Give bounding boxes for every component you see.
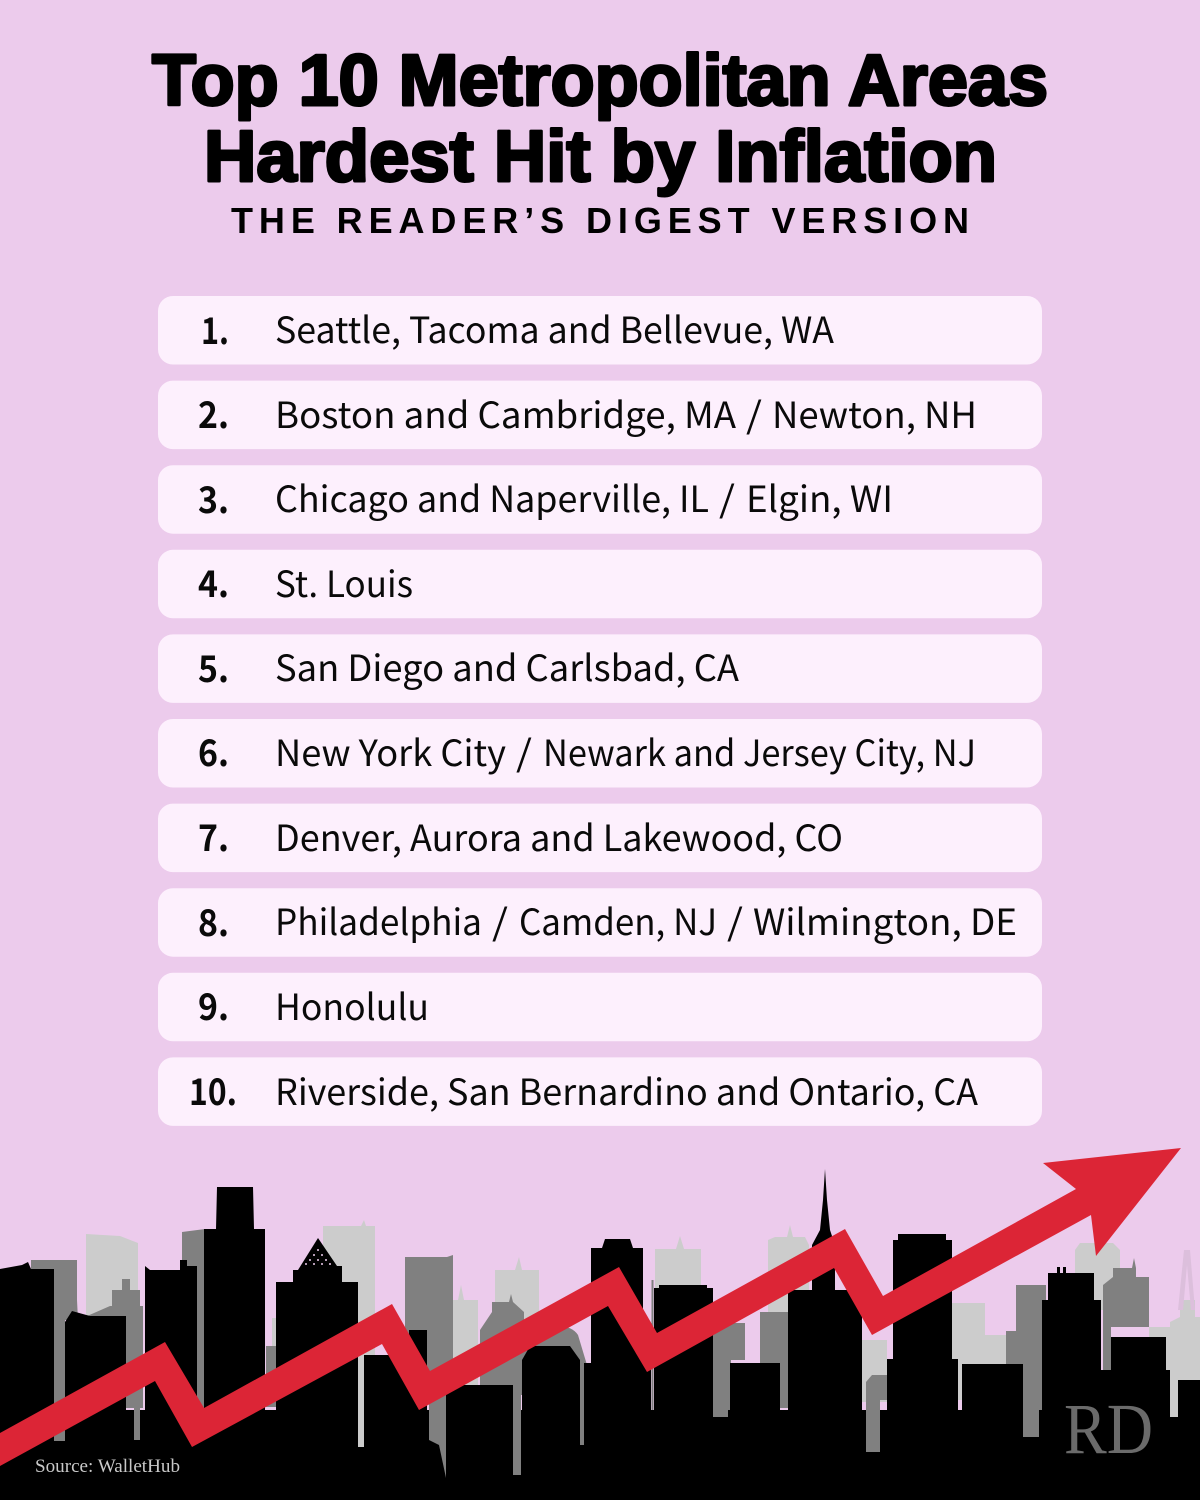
row 6: [158, 719, 1042, 788]
row 4: 4.: [198, 554, 229, 608]
row 9: Honolulu: [275, 979, 429, 1031]
row 6: Newark and Jersey City, NJ: [543, 725, 976, 777]
title: Top 10 Metropolitan Areas: [152, 41, 1048, 121]
row 5: San Diego and Carlsbad, CA: [275, 640, 739, 692]
row 5: 5.: [198, 639, 229, 693]
row 2: Newton, NH: [772, 387, 977, 439]
skyline: foreground black buildings: [0, 1169, 1200, 1500]
row 1: Seattle, Tacoma and Bellevue, WA: [275, 302, 834, 354]
row 5: [158, 634, 1042, 703]
row 7: Denver, Aurora and Lakewood, CO: [275, 810, 843, 862]
row 8: [158, 888, 1042, 957]
row 2: /: [746, 387, 762, 439]
logo: RD: RD: [1064, 1389, 1153, 1469]
row 7: [158, 804, 1042, 872]
title: Hardest Hit by Inflation: [204, 117, 997, 197]
icon: dotted pyramid roof detail: [305, 1249, 331, 1265]
row 10: [158, 1057, 1042, 1126]
skyline: middle grey buildings: [31, 1229, 1149, 1420]
subtitle: THE READER’S DIGEST VERSION: [231, 200, 969, 241]
row 1: [158, 296, 1042, 364]
row 3: [158, 465, 1042, 534]
ranked list: [158, 296, 1042, 1126]
row 10: Riverside, San Bernardino and Ontario, CA: [275, 1064, 978, 1116]
source credit: Source: WalletHub: [35, 1456, 180, 1477]
row 3: 3.: [198, 470, 229, 524]
row 4: St. Louis: [275, 556, 413, 608]
row 1: 1.: [201, 301, 229, 355]
row 2: [158, 381, 1042, 449]
row 10: 10.: [189, 1062, 237, 1116]
row 8: /: [727, 894, 743, 946]
row 6: 6.: [198, 723, 229, 777]
row 8: 8.: [198, 893, 229, 947]
row 9: [158, 973, 1042, 1041]
skyline: grey notches cut into ground: [54, 1280, 1039, 1478]
row 9: 9.: [198, 977, 229, 1031]
row 3: /: [719, 471, 735, 523]
skyline: light notches cut into ground: [358, 1340, 1178, 1447]
row 6: /: [516, 725, 532, 777]
row 3: Elgin, WI: [746, 471, 893, 523]
title: [152, 41, 1048, 197]
row 7: 7.: [198, 808, 229, 862]
row 6: New York City: [275, 725, 506, 777]
row 8: Philadelphia: [275, 894, 482, 946]
row 2: Boston and Cambridge, MA: [275, 387, 736, 439]
ground: [0, 1410, 1200, 1500]
arrow: rising red zigzag: [0, 1148, 1181, 1466]
row 8: /: [492, 894, 508, 946]
row 3: Chicago and Naperville, IL: [275, 471, 709, 523]
row 2: 2.: [198, 385, 229, 439]
row 4: [158, 550, 1042, 618]
skyline: far light buildings: [86, 1220, 1200, 1420]
row 8: Camden, NJ: [519, 894, 717, 946]
row 8: Wilmington, DE: [753, 894, 1017, 946]
